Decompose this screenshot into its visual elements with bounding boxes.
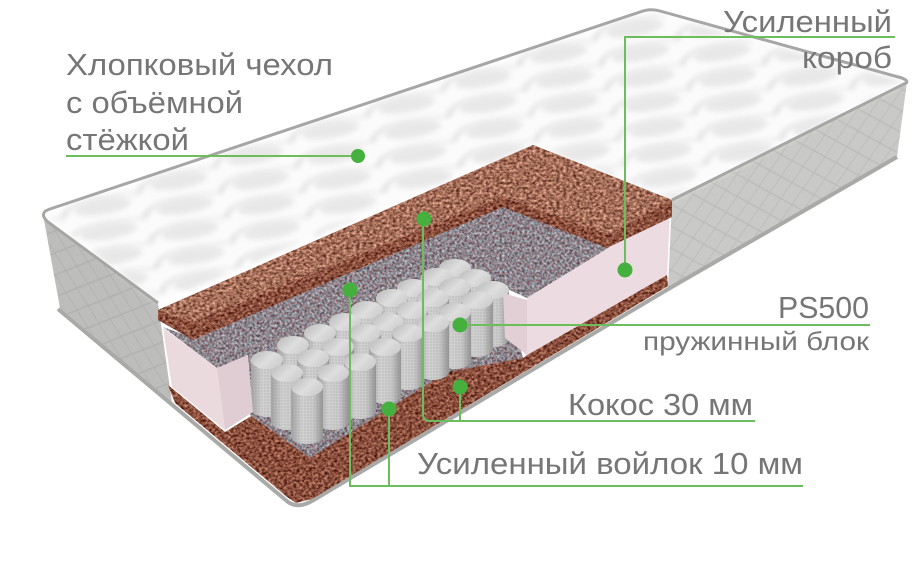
bottom coconut layer: [168, 275, 668, 503]
mattress left side panel: [44, 220, 172, 403]
callout: cotton cover: стёжкой: [66, 122, 189, 157]
callout: cotton cover: Хлопковый чехол: [66, 47, 333, 82]
top felt layer: [163, 205, 610, 368]
callout: PS500 spring block: пружинный блок: [643, 326, 870, 356]
right foam block: [503, 214, 670, 355]
callout: PS500 spring block: PS500: [778, 290, 869, 325]
mattress right side panel: [668, 82, 907, 288]
callout: PS500 spring block: [452, 290, 870, 356]
callout: reinforced box: [618, 4, 895, 278]
quilted cotton cover top: [43, 10, 907, 303]
callout: coconut 30 mm: Кокос 30 мм: [568, 387, 753, 422]
spring cavity back and bottom felt: [248, 257, 523, 458]
callout: reinforced felt 10 mm: [342, 282, 803, 486]
callout: coconut 30 mm: [416, 212, 755, 422]
callout: cotton cover: [66, 47, 365, 163]
pocket spring block: [251, 259, 509, 444]
mattress bottom piping: [58, 157, 897, 505]
callout: cotton cover: с объёмной: [66, 85, 243, 120]
callout: reinforced felt 10 mm: Усиленный войлок 10 мм: [417, 446, 803, 481]
left foam block: [163, 328, 253, 430]
callout: reinforced box: Усиленный: [723, 4, 892, 39]
top coconut layer L-shaped: [158, 145, 672, 340]
callout: reinforced box: короб: [802, 40, 892, 75]
